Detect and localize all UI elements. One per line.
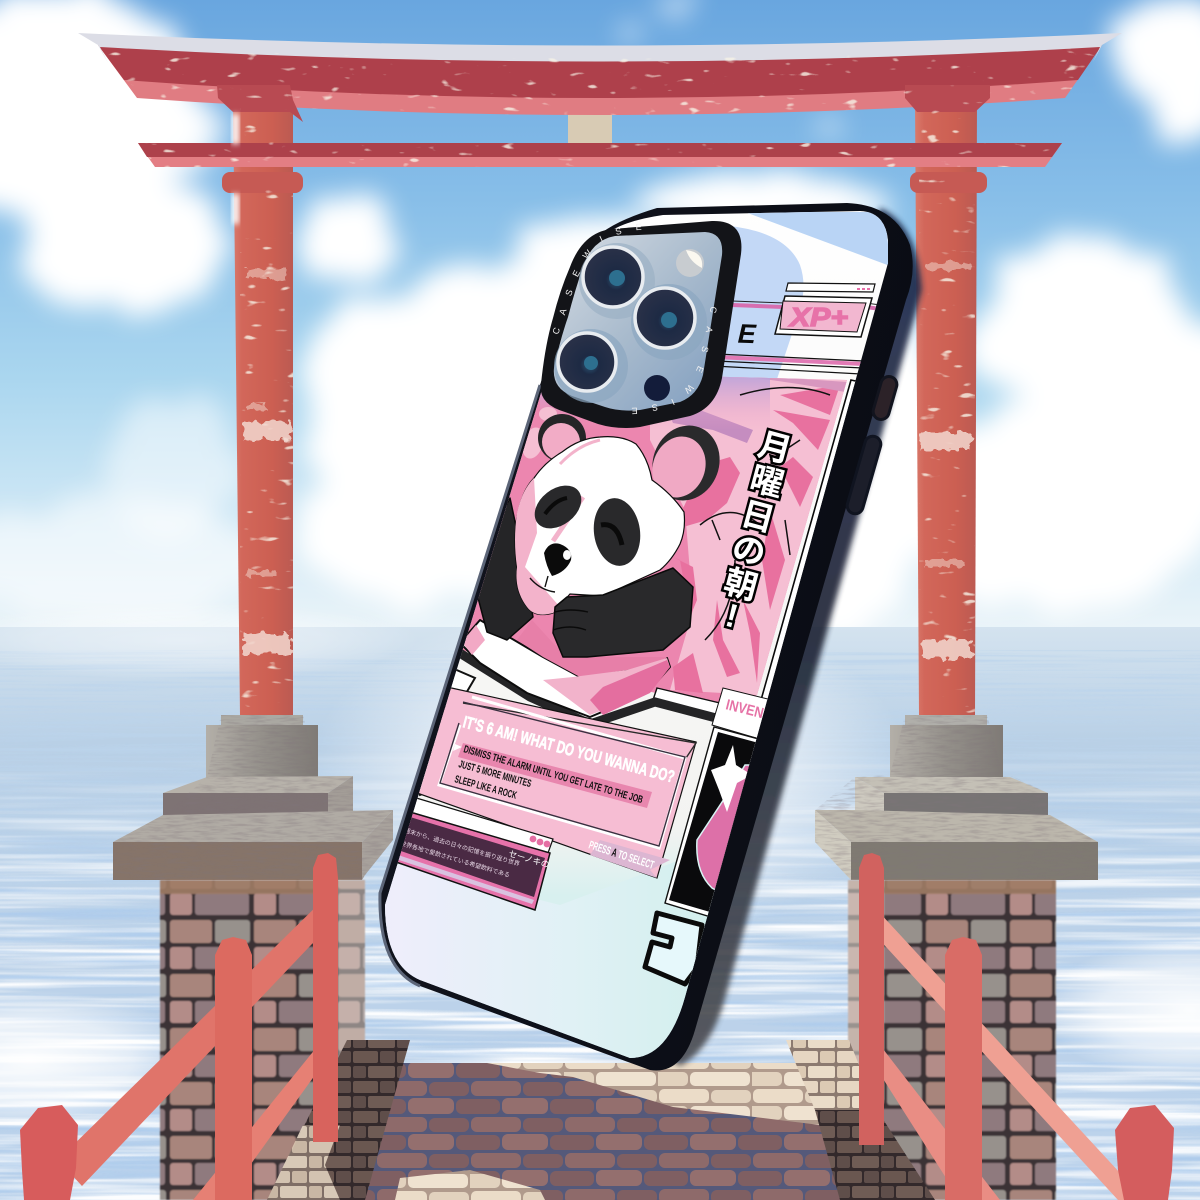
fold lines: [700, 386, 830, 640]
Japanese vertical title: 月: [754, 425, 796, 470]
lens right: [631, 284, 707, 360]
inventory tab: [712, 688, 780, 742]
Japanese vertical title: [720, 425, 796, 635]
menu option 1: DISMISS THE ALARM UNTIL YOU GET LATE TO THE JOB: [462, 743, 645, 806]
left brick pedestal: [160, 880, 365, 1200]
right eye patch: [589, 495, 645, 569]
menu option 3: SLEEP LIKE A ROCK: [453, 773, 518, 802]
top curved beam: [78, 33, 1122, 115]
side button: action: [871, 375, 899, 421]
Japanese vertical title: 日: [737, 494, 779, 539]
right curb: [786, 1040, 877, 1110]
left railing: [20, 853, 338, 1200]
camera bump: [540, 221, 742, 428]
left ear: [538, 414, 586, 462]
selection highlight: [458, 743, 652, 808]
flash: [676, 249, 704, 277]
ocean water: [0, 600, 1200, 1200]
dark info window: セーノキの: [507, 848, 551, 870]
star sparkle: [711, 745, 752, 812]
left eye patch: [526, 477, 590, 537]
dark info window: 世界各地で愛飲されている希望飲料である: [399, 839, 511, 879]
illustration right frame: [761, 380, 860, 702]
pillow shadow band: [455, 650, 716, 724]
weathered paint chips: [90, 40, 1110, 720]
torii gate: [78, 33, 1122, 720]
clouds: [0, 0, 1200, 630]
side buttons: volume: [845, 434, 883, 516]
right ear: [652, 426, 720, 500]
lower mint gradient area: [385, 862, 720, 1058]
large katakana glyph: [645, 913, 702, 984]
sunlit paving: [487, 1063, 820, 1125]
panda: [476, 414, 730, 657]
inventory black card: [665, 727, 775, 918]
camera glass plate: [554, 232, 722, 411]
Japanese vertical title: 曜: [746, 459, 788, 504]
left pillar: [233, 100, 293, 716]
stone grain: [110, 710, 1110, 885]
potion bottle: [697, 765, 775, 895]
head pink shading: [515, 478, 560, 615]
top collars: [217, 85, 990, 193]
header letter E: E: [737, 319, 757, 349]
nose and mouth: [530, 543, 571, 592]
centre post: [568, 105, 612, 143]
Japanese vertical title: の: [728, 528, 770, 573]
pillow: [460, 620, 670, 717]
inventory tab: INVENT: [724, 696, 773, 724]
dark info window: [396, 797, 553, 910]
background blobs: [523, 428, 541, 458]
illustration bottom white strip: [653, 687, 718, 713]
brand ring text: CASEWISE: [553, 224, 642, 334]
lower tie beam: [138, 143, 1062, 167]
menu option 2: JUST 5 MORE MINUTES: [457, 758, 533, 790]
sky background: [0, 0, 1200, 630]
lidar sensor: [644, 375, 670, 401]
worn pillar bands: [243, 262, 972, 658]
lavender shading under camera: [540, 376, 770, 414]
blanket: [650, 372, 847, 695]
reflection behind camera: [722, 226, 804, 378]
right stone base: [815, 715, 1098, 880]
Japanese vertical title: 朝: [720, 562, 762, 607]
printed phone face artwork: [370, 200, 900, 1070]
dialog box: what do you wanna do: [417, 687, 696, 878]
XP+ badge: XP+: [788, 302, 848, 332]
brand ring text: CASEWISE: [632, 307, 716, 414]
Japanese vertical title: !: [722, 596, 742, 635]
XP+ badge: [775, 283, 875, 337]
header pink lines: [714, 301, 881, 374]
dark info window: 週末から、過去の日々の記憶を振り返り世界: [403, 826, 521, 868]
lens lower: [554, 329, 628, 403]
brand ring text: [553, 224, 716, 414]
peeking panda character: [410, 668, 475, 795]
question heading: IT'S 6 AM! WHAT DO YOU WANNA DO?: [461, 712, 677, 787]
phone case body: [380, 203, 922, 1070]
press a hint: PRESS A TO SELECT: [587, 839, 655, 872]
left curb: [267, 1040, 410, 1200]
right pillar: [915, 100, 977, 716]
lens top: [579, 243, 655, 319]
selection arrow: [453, 744, 462, 751]
sky-blue reflection top right: [745, 212, 890, 266]
pillar glow: [232, 114, 239, 224]
stone walkway: [267, 1040, 935, 1200]
right arm: [553, 568, 693, 657]
illustration panel: [460, 372, 860, 716]
right brick pedestal: [848, 880, 1056, 1200]
left stone base: [113, 715, 393, 880]
blanket streaks: [673, 385, 840, 693]
left arm: [476, 498, 533, 640]
right railing: [859, 853, 1174, 1200]
head: [515, 437, 684, 615]
